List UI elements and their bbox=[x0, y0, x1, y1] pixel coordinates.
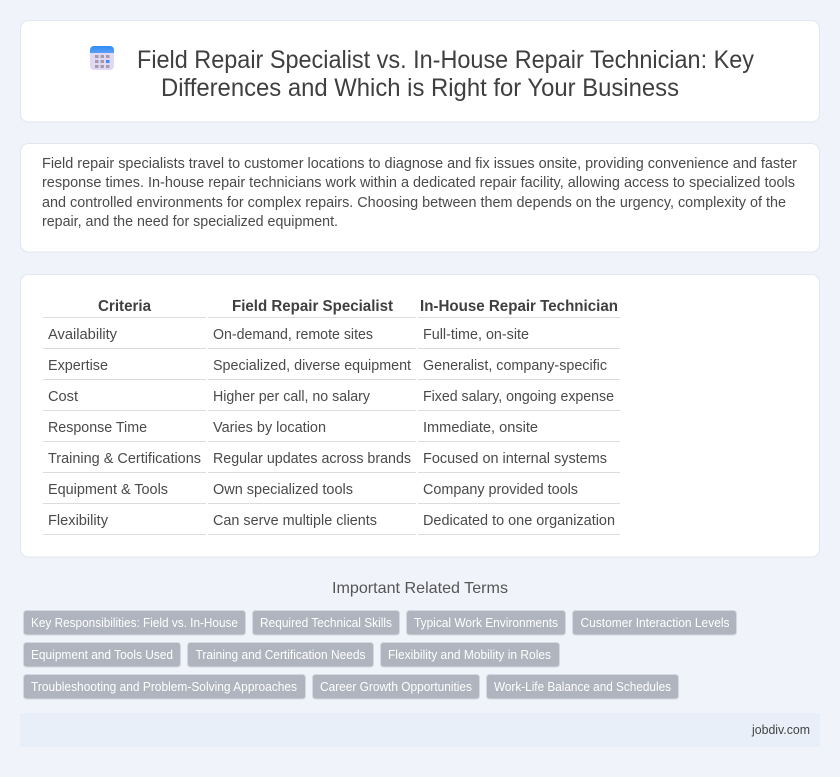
table row: cost: Fixed salary, ongoing expense bbox=[423, 389, 614, 405]
table row: flexibility: Flexibility bbox=[48, 513, 109, 529]
panel: comparison table bbox=[20, 274, 820, 557]
table header: In-House Repair Technician bbox=[420, 298, 618, 315]
table row: cost: Cost bbox=[48, 389, 78, 405]
tag: Flexibility and Mobility in Roles bbox=[388, 647, 551, 662]
tag bbox=[406, 610, 566, 635]
tag: Troubleshooting and Problem-Solving Approaches bbox=[31, 679, 297, 694]
table row: cost bbox=[43, 389, 620, 410]
table row: response time: Immediate, onsite bbox=[423, 420, 538, 436]
tag: Work-Life Balance and Schedules bbox=[494, 679, 671, 694]
table row: equipment and tools: Own specialized tools bbox=[213, 482, 353, 498]
table header: Criteria bbox=[98, 298, 151, 315]
text block: introduction: and controlled environments for complex repairs. Choosing between them depends on the urgency, complexity of the bbox=[42, 195, 786, 211]
footer bbox=[20, 713, 820, 747]
table row: response time bbox=[43, 420, 620, 442]
tag bbox=[486, 674, 678, 699]
table row: training and certifications: Focused on internal systems bbox=[423, 451, 607, 467]
tags: related terms bbox=[24, 610, 736, 699]
tag bbox=[252, 610, 400, 635]
heading: important related terms: Important Related Terms bbox=[332, 580, 508, 597]
table row: training and certifications bbox=[43, 451, 620, 472]
tag: Training and Certification Needs bbox=[196, 647, 366, 662]
title: Differences and Which is Right for Your Business bbox=[161, 74, 679, 102]
tag: Required Technical Skills bbox=[260, 615, 392, 630]
table row: flexibility: Dedicated to one organization bbox=[423, 513, 615, 529]
tag: Key Responsibilities: Field vs. In-House bbox=[31, 615, 238, 630]
table row: equipment and tools bbox=[43, 482, 620, 504]
tag: Equipment and Tools Used bbox=[31, 647, 173, 662]
tag: Typical Work Environments bbox=[414, 615, 558, 630]
table row: flexibility: Can serve multiple clients bbox=[213, 513, 377, 529]
table header bbox=[43, 298, 620, 318]
table header: Field Repair Specialist bbox=[232, 298, 394, 315]
table row: equipment and tools: Equipment & Tools bbox=[48, 482, 168, 498]
text block: introduction: repair, and the need for specialized equipment. bbox=[42, 214, 338, 230]
table row: expertise: Generalist, company-specific bbox=[423, 358, 607, 374]
table row: availability: On-demand, remote sites bbox=[213, 327, 373, 343]
table row: response time: Response Time bbox=[48, 420, 147, 436]
tag bbox=[24, 642, 180, 667]
table row: expertise: Specialized, diverse equipment bbox=[213, 358, 411, 374]
text block: introduction: response times. In-house repair technicians work within a dedicated repair facility, allowing access to specialized tools bbox=[42, 175, 795, 191]
tag bbox=[188, 642, 374, 667]
footer text: jobdiv.com: jobdiv.com bbox=[751, 722, 810, 737]
icon: calendar bbox=[90, 46, 114, 70]
table row: equipment and tools: Company provided tools bbox=[423, 482, 578, 498]
tag bbox=[572, 610, 736, 635]
table row: expertise: Expertise bbox=[48, 358, 108, 374]
text block: introduction: Field repair specialists travel to customer locations to diagnose and fix issues onsite, providing convenience and faster bbox=[42, 156, 797, 172]
table row: availability: Availability bbox=[48, 327, 118, 343]
table row: availability bbox=[43, 327, 620, 348]
title bbox=[137, 46, 754, 102]
tag: Career Growth Opportunities bbox=[320, 679, 472, 694]
table row: cost: Higher per call, no salary bbox=[213, 389, 371, 405]
title: Field Repair Specialist vs. In-House Repair Technician: Key bbox=[137, 46, 754, 74]
text block: introduction bbox=[42, 156, 797, 230]
table row: response time: Varies by location bbox=[213, 420, 326, 436]
table row: training and certifications: Training & Certifications bbox=[48, 451, 201, 467]
table row: flexibility bbox=[43, 513, 620, 534]
tag bbox=[24, 610, 246, 635]
tag: Customer Interaction Levels bbox=[580, 615, 730, 630]
panel: header bbox=[20, 20, 820, 122]
table row: training and certifications: Regular updates across brands bbox=[213, 451, 411, 467]
table row: availability: Full-time, on-site bbox=[423, 327, 529, 343]
tag bbox=[312, 674, 480, 699]
tag bbox=[24, 674, 306, 699]
tag bbox=[380, 642, 560, 667]
table row: expertise bbox=[43, 358, 620, 380]
panel: introduction bbox=[20, 144, 820, 252]
